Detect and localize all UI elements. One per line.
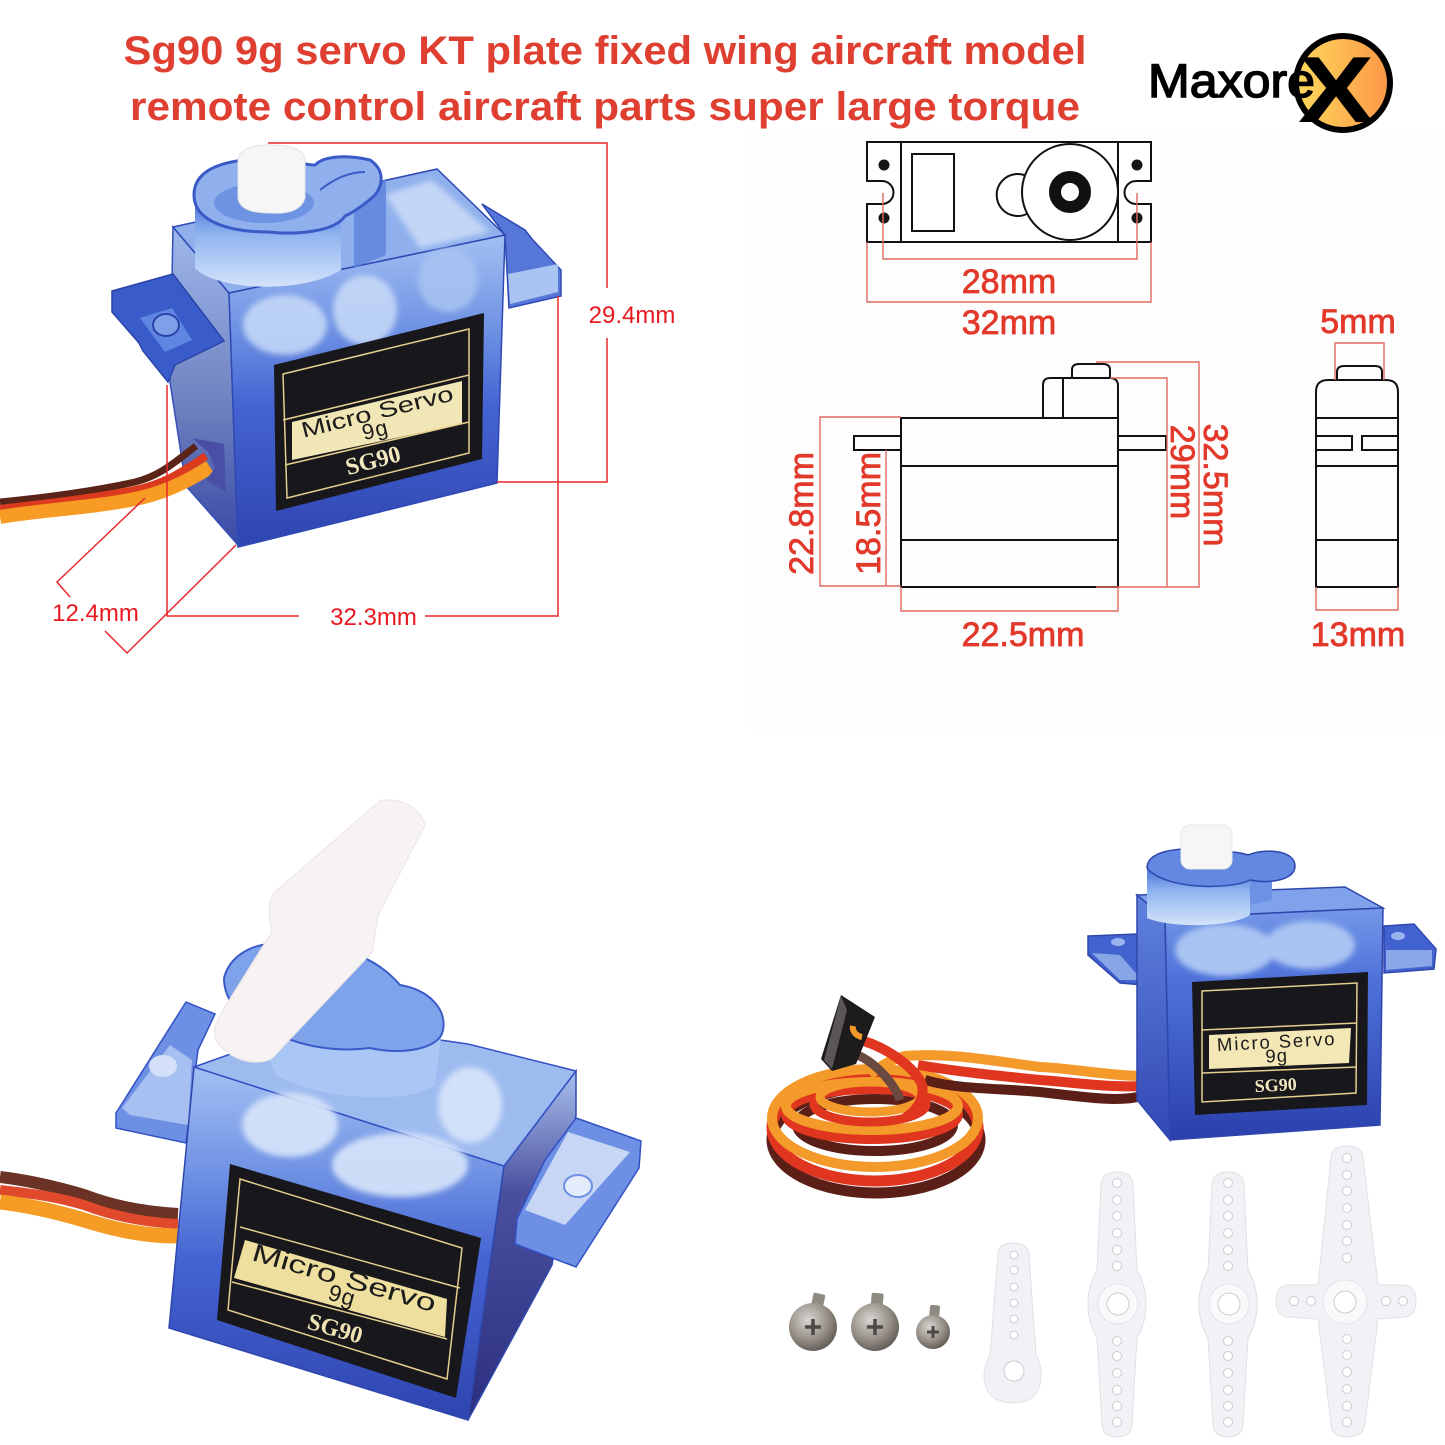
- label: 9g: [359, 414, 391, 445]
- label: [274, 313, 484, 511]
- panel: technical drawings: [783, 142, 1405, 654]
- panel: servo with horn photo: [0, 800, 641, 1420]
- label: 9g: [325, 1279, 359, 1312]
- label: 5mm: 5mm: [1320, 303, 1396, 341]
- wires: [0, 446, 210, 517]
- left mounting flange: [1088, 934, 1162, 985]
- servo body top: [1137, 887, 1383, 918]
- label: 22.8mm: 22.8mm: [783, 452, 821, 575]
- label: Micro Servo: [298, 381, 456, 443]
- side view drawing: [1316, 366, 1398, 587]
- logo: MaxoreX: [1148, 36, 1390, 142]
- servo body front: [229, 235, 505, 547]
- logo: MaxoreX: X: [1298, 37, 1374, 142]
- label: [1192, 972, 1368, 1115]
- dimension text: 12.4mm: 12.4mm: [52, 600, 139, 627]
- gears: [242, 1067, 502, 1197]
- gears: [1175, 921, 1355, 976]
- gears: [243, 248, 478, 355]
- label: 9g: [1265, 1044, 1288, 1067]
- label: 13mm: 13mm: [1311, 616, 1405, 654]
- gear tower: [224, 944, 444, 1097]
- output shaft: [238, 145, 305, 213]
- dimension text: 32.3mm: 32.3mm: [330, 604, 417, 631]
- dimension lines: [57, 143, 607, 653]
- label: SG90: [304, 1309, 365, 1349]
- dimension text: 29.4mm: 29.4mm: [589, 302, 675, 329]
- right mounting flange: [1384, 924, 1436, 973]
- label: 22.5mm: 22.5mm: [962, 616, 1084, 654]
- logo: MaxoreX: Maxore: [1148, 54, 1315, 107]
- panel: dimensioned servo photo: [0, 143, 675, 653]
- wire grommet: [192, 438, 226, 492]
- servo body right side: [468, 1071, 576, 1420]
- label: 18.5mm: 18.5mm: [850, 452, 888, 575]
- label: SG90: [343, 441, 404, 481]
- gear tower: [194, 157, 386, 287]
- red dimension lines: [820, 193, 1398, 611]
- gear tower: [1147, 849, 1295, 925]
- servo body left side: [170, 227, 238, 545]
- panel: servo with cable and accessories: [772, 825, 1436, 1437]
- wires: [0, 1177, 178, 1236]
- servo body top: [173, 169, 505, 293]
- label: 32.5mm: 32.5mm: [1196, 424, 1234, 546]
- servo horn: [215, 800, 425, 1062]
- connector: [821, 995, 875, 1071]
- screw 1: [789, 1292, 837, 1351]
- top view drawing: [867, 142, 1151, 242]
- servo body top: [194, 1040, 576, 1166]
- screw 3: [916, 1305, 950, 1349]
- label: Micro Servo: [1216, 1028, 1337, 1055]
- label: [217, 1164, 481, 1398]
- horn: double arm A: [1088, 1172, 1146, 1437]
- right mounting flange: [482, 204, 561, 308]
- output shaft: [1181, 825, 1232, 869]
- screw 2: [851, 1293, 899, 1351]
- front view drawing: [854, 364, 1166, 587]
- mounting holes: [878, 160, 1142, 224]
- horn: single arm: [984, 1243, 1041, 1403]
- servo body front: [1165, 908, 1383, 1140]
- title: remote control aircraft parts super large torque: [130, 85, 1080, 129]
- servo body left side: [1137, 895, 1170, 1140]
- label: SG90: [1254, 1074, 1297, 1096]
- horn: double arm B: [1199, 1172, 1257, 1437]
- coiled cable: [772, 1039, 1142, 1193]
- title: [124, 29, 1086, 129]
- label: 28mm: 28mm: [962, 263, 1056, 301]
- horn: cross: [1276, 1146, 1416, 1437]
- label: 32mm: 32mm: [962, 304, 1056, 342]
- title: Sg90 9g servo KT plate fixed wing aircraft model: [124, 29, 1086, 73]
- label: Micro Servo: [249, 1239, 439, 1318]
- servo body front: [169, 1067, 504, 1420]
- left mounting flange: [116, 1002, 215, 1143]
- right mounting flange: [515, 1118, 641, 1267]
- left mounting flange: [112, 274, 224, 382]
- label: 29mm: 29mm: [1163, 425, 1201, 519]
